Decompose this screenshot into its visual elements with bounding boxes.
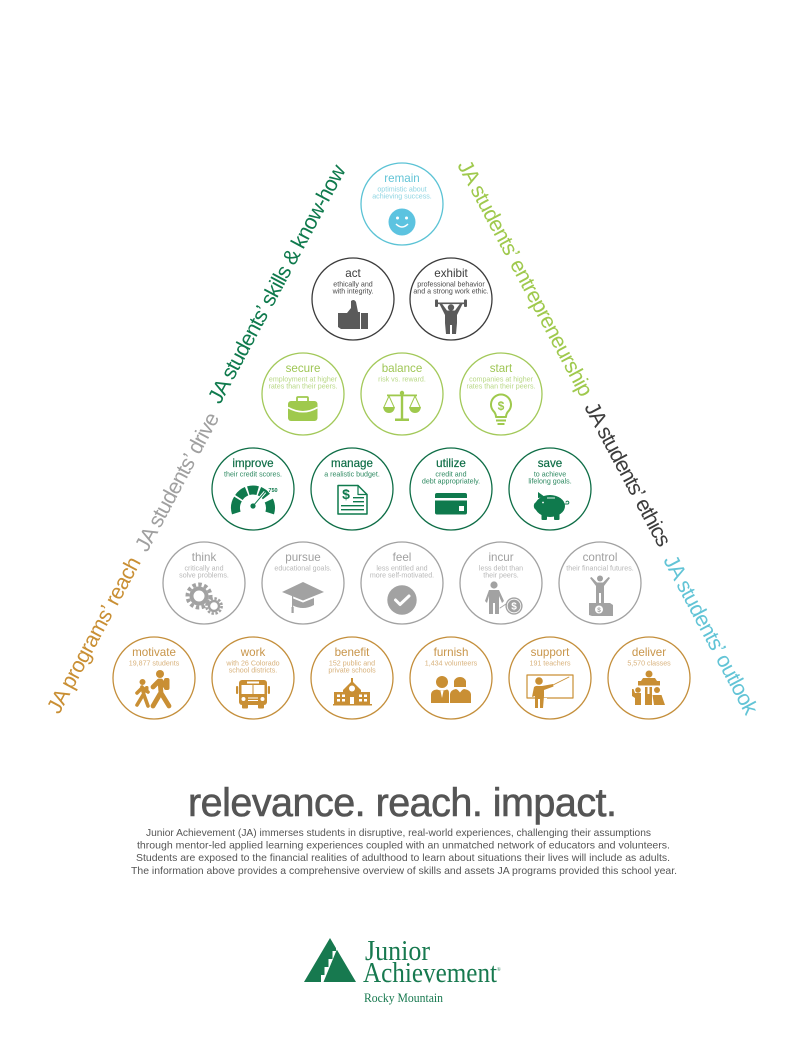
- icon: scales: [383, 391, 421, 421]
- circle: utilize: utilize: [436, 457, 466, 470]
- circle: remain: [361, 163, 443, 245]
- circle: manage: manage: [331, 457, 373, 470]
- circle: think: solve problems.: [179, 572, 229, 580]
- circle: improve: [212, 448, 294, 530]
- circle: incur: [460, 542, 542, 624]
- side label: JA students' skills and know-how: JA students’ skills & know-how: [203, 160, 351, 407]
- circle: work: work: [240, 646, 265, 659]
- circle: benefit: 152 public and: [329, 660, 375, 668]
- circle: support: [509, 637, 591, 719]
- circle: feel: more self-motivated.: [370, 572, 434, 580]
- circle: control: their financial futures.: [566, 564, 634, 572]
- circle: remain: achieving success.: [372, 192, 432, 200]
- circle: motivate: motivate: [132, 646, 176, 659]
- circle: feel: feel: [393, 551, 411, 564]
- title: relevance. reach. impact.: [188, 781, 617, 825]
- circle: manage: a realistic budget.: [324, 470, 380, 478]
- circle: think: think: [192, 551, 216, 564]
- circle: furnish: 1,434 volunteers: [425, 660, 478, 668]
- circle: act: with integrity.: [332, 288, 373, 296]
- circle: start: start: [490, 362, 513, 375]
- circle: deliver: [608, 637, 690, 719]
- icon: gears: [188, 584, 222, 614]
- body text: Students are exposed to the financial realities of adulthood to learn about situations their lives will include as adults.: [136, 853, 670, 864]
- circle: pursue: [262, 542, 344, 624]
- icon: piggy bank: [534, 492, 569, 520]
- circle: work: with 26 Colorado: [225, 660, 280, 668]
- side label: JA programs' reach: JA programs’ reach: [42, 553, 146, 717]
- circle: utilize: debt appropriately.: [422, 478, 480, 486]
- icon: teacher at board: [527, 675, 573, 709]
- circle: act: ethically and: [333, 280, 373, 288]
- icon: school building: [333, 678, 372, 706]
- icon: light bulb: $: [498, 399, 505, 413]
- circle: feel: [361, 542, 443, 624]
- circle: work: [212, 637, 294, 719]
- icon: check mark: [387, 585, 417, 615]
- circle: pursue: educational goals.: [274, 564, 332, 572]
- circle: think: [163, 542, 245, 624]
- circle: incur: less debt than: [479, 564, 523, 572]
- circle: secure: [262, 353, 344, 435]
- circle: manage: [311, 448, 393, 530]
- side label: JA students' outlook: JA students’ outlook: [659, 551, 763, 719]
- circle: exhibit: and a strong work ethic.: [413, 288, 489, 296]
- circle: think: critically and: [184, 564, 224, 572]
- circle: support: support: [531, 646, 570, 659]
- circle: motivate: [113, 637, 195, 719]
- circle: start: rates than their peers.: [466, 382, 536, 390]
- circle: benefit: benefit: [335, 646, 370, 659]
- circle: furnish: [410, 637, 492, 719]
- icon: class group: [632, 670, 665, 705]
- circle: incur: their peers.: [483, 572, 519, 580]
- circle: start: companies at higher: [469, 376, 534, 384]
- icon: credit card: [435, 493, 467, 514]
- circle: benefit: [311, 637, 393, 719]
- icon: person on money stack: $: [597, 607, 601, 614]
- circle: save: lifelong goals.: [528, 478, 572, 486]
- icon: graduation cap: [282, 582, 324, 613]
- circle: exhibit: [410, 258, 492, 340]
- icon: thumbs up: [338, 300, 368, 329]
- circle: benefit: private schools: [328, 666, 376, 674]
- body text: [131, 828, 677, 877]
- circle: deliver: 5,570 classes: [627, 660, 671, 668]
- circle: incur: incur: [488, 551, 514, 564]
- circle: secure: rates than their peers.: [268, 382, 338, 390]
- circle: balance: [361, 353, 443, 435]
- circle: furnish: furnish: [434, 646, 468, 659]
- circle: deliver: deliver: [632, 646, 666, 659]
- circle: balance: balance: [382, 362, 422, 375]
- circle: utilize: [410, 448, 492, 530]
- circle: remain: remain: [384, 172, 420, 185]
- circle: start: [460, 353, 542, 435]
- circle: pursue: pursue: [285, 551, 321, 564]
- circle: secure: employment at higher: [269, 376, 338, 384]
- body text: through mentor-led applied learning experiences coupled with an unmatched network of educators and volunteers.: [137, 840, 670, 852]
- circle: save: to achieve: [534, 470, 566, 478]
- logo wordmark: [363, 936, 501, 1005]
- circle: support: 191 teachers: [529, 660, 571, 668]
- icon: credit gauge: 750: [268, 488, 278, 494]
- circle: save: save: [538, 457, 562, 470]
- circle: save: [509, 448, 591, 530]
- circle: act: [312, 258, 394, 340]
- logo: Junior Achievement Rocky Mountain: [304, 936, 501, 1005]
- icon: two volunteers: [431, 676, 471, 703]
- logo wordmark: Rocky Mountain: [364, 990, 443, 1005]
- icon: weightlifter: [435, 300, 467, 334]
- logo wordmark: Achievement: [363, 958, 497, 989]
- circle: utilize: credit and: [435, 470, 467, 478]
- icon: briefcase: [288, 397, 318, 421]
- icon: person with coin: $: [511, 602, 517, 612]
- icon: smiley: [388, 208, 416, 236]
- circle: work: school districts.: [229, 666, 277, 674]
- circle: improve: their credit scores.: [224, 470, 282, 478]
- icon: adult and child walking: [137, 670, 170, 706]
- side label: JA students' entrepreneurship: JA students’ entrepreneurship: [453, 156, 598, 400]
- circle: secure: secure: [286, 362, 320, 375]
- logo mark: triangle with steps: [304, 938, 356, 982]
- circle: improve: improve: [232, 457, 274, 470]
- circle: act: act: [345, 267, 362, 280]
- side label: JA students' drive: JA students’ drive: [130, 408, 224, 555]
- circle: feel: less entitled and: [376, 564, 428, 572]
- body text: The information above provides a comprehensive overview of skills and assets JA programs provided this school year.: [131, 866, 677, 877]
- circle: remain: optimistic about: [377, 186, 427, 194]
- circle: exhibit: exhibit: [434, 267, 469, 280]
- circle: exhibit: professional behavior: [417, 280, 485, 288]
- body text: Junior Achievement (JA) immerses students in disruptive, real-world experiences, challenging their assumptions: [146, 828, 651, 839]
- icon: budget document: $: [342, 486, 350, 502]
- side label: JA students' ethics: JA students’ ethics: [580, 398, 676, 551]
- icon: school bus: [236, 680, 270, 708]
- logo wordmark: Junior: [365, 936, 431, 967]
- circle: motivate: 19,877 students: [129, 660, 180, 668]
- logo wordmark: ®: [497, 967, 501, 973]
- circle: control: control: [583, 551, 617, 564]
- circle: balance: risk vs. reward.: [378, 376, 426, 384]
- circle: control: [559, 542, 641, 624]
